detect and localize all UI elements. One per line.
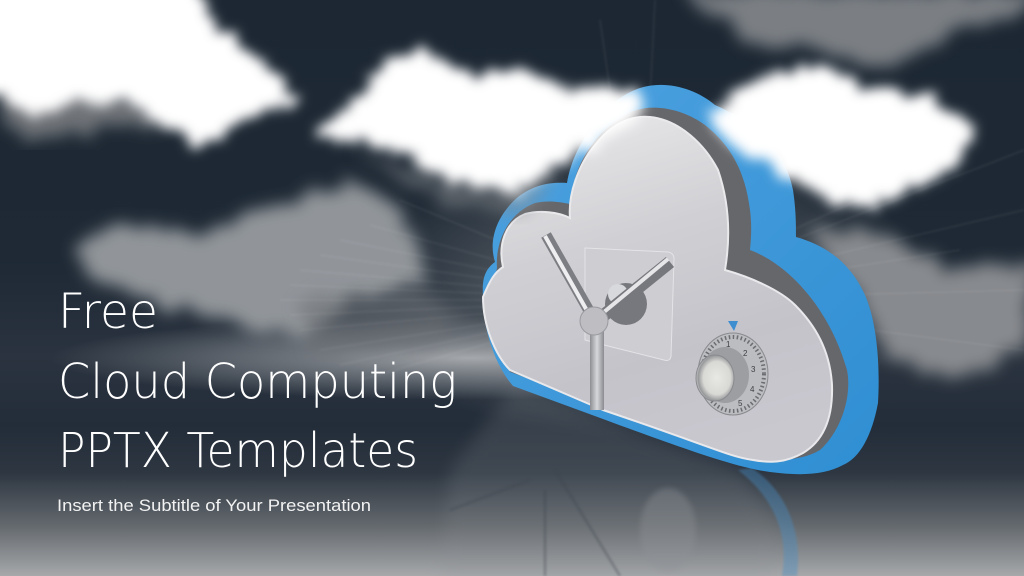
- halo behind the cloud safe: [350, 140, 930, 440]
- subtitle: Insert the Subtitle of Your Presentation: [57, 496, 371, 515]
- lock socket: [605, 283, 647, 325]
- handle spoke: down: [590, 330, 604, 410]
- title: Free: [58, 284, 158, 340]
- combination dial: [696, 333, 768, 415]
- light rays behind the cloud safe: [280, 0, 1024, 380]
- handle spoke: up left: [545, 235, 592, 316]
- cloud: top left grey fringe: [0, 78, 170, 138]
- dark grey inner band: [494, 108, 848, 460]
- square lock plate: [585, 248, 674, 360]
- combination dial: 5: [738, 399, 743, 408]
- outer blue shell: [483, 85, 879, 474]
- cloud: white over safe, top right: [712, 68, 972, 204]
- title: Cloud Computing: [58, 354, 457, 410]
- cloud: top left white: [0, 0, 296, 142]
- cloud: top right grey: [690, 0, 1024, 66]
- handle hub: [580, 307, 608, 335]
- combination dial: 1: [726, 340, 731, 349]
- combination dial: 4: [750, 385, 755, 394]
- title: PPTX Templates: [58, 423, 418, 479]
- combination dial: 2: [743, 349, 748, 358]
- silver front panel: [483, 117, 832, 462]
- safe reflection on the floor: [440, 385, 798, 576]
- cloud safe icon: [483, 85, 879, 474]
- combination dial: 3: [751, 365, 756, 374]
- cloud: centre white: [318, 52, 638, 212]
- horizon glow: [50, 316, 890, 400]
- cloud: mid-left grey: [82, 186, 480, 350]
- dial marker: [728, 321, 738, 331]
- title: [58, 284, 457, 479]
- handle spoke: up right: [598, 259, 670, 320]
- cloud: right grey: [815, 232, 1024, 372]
